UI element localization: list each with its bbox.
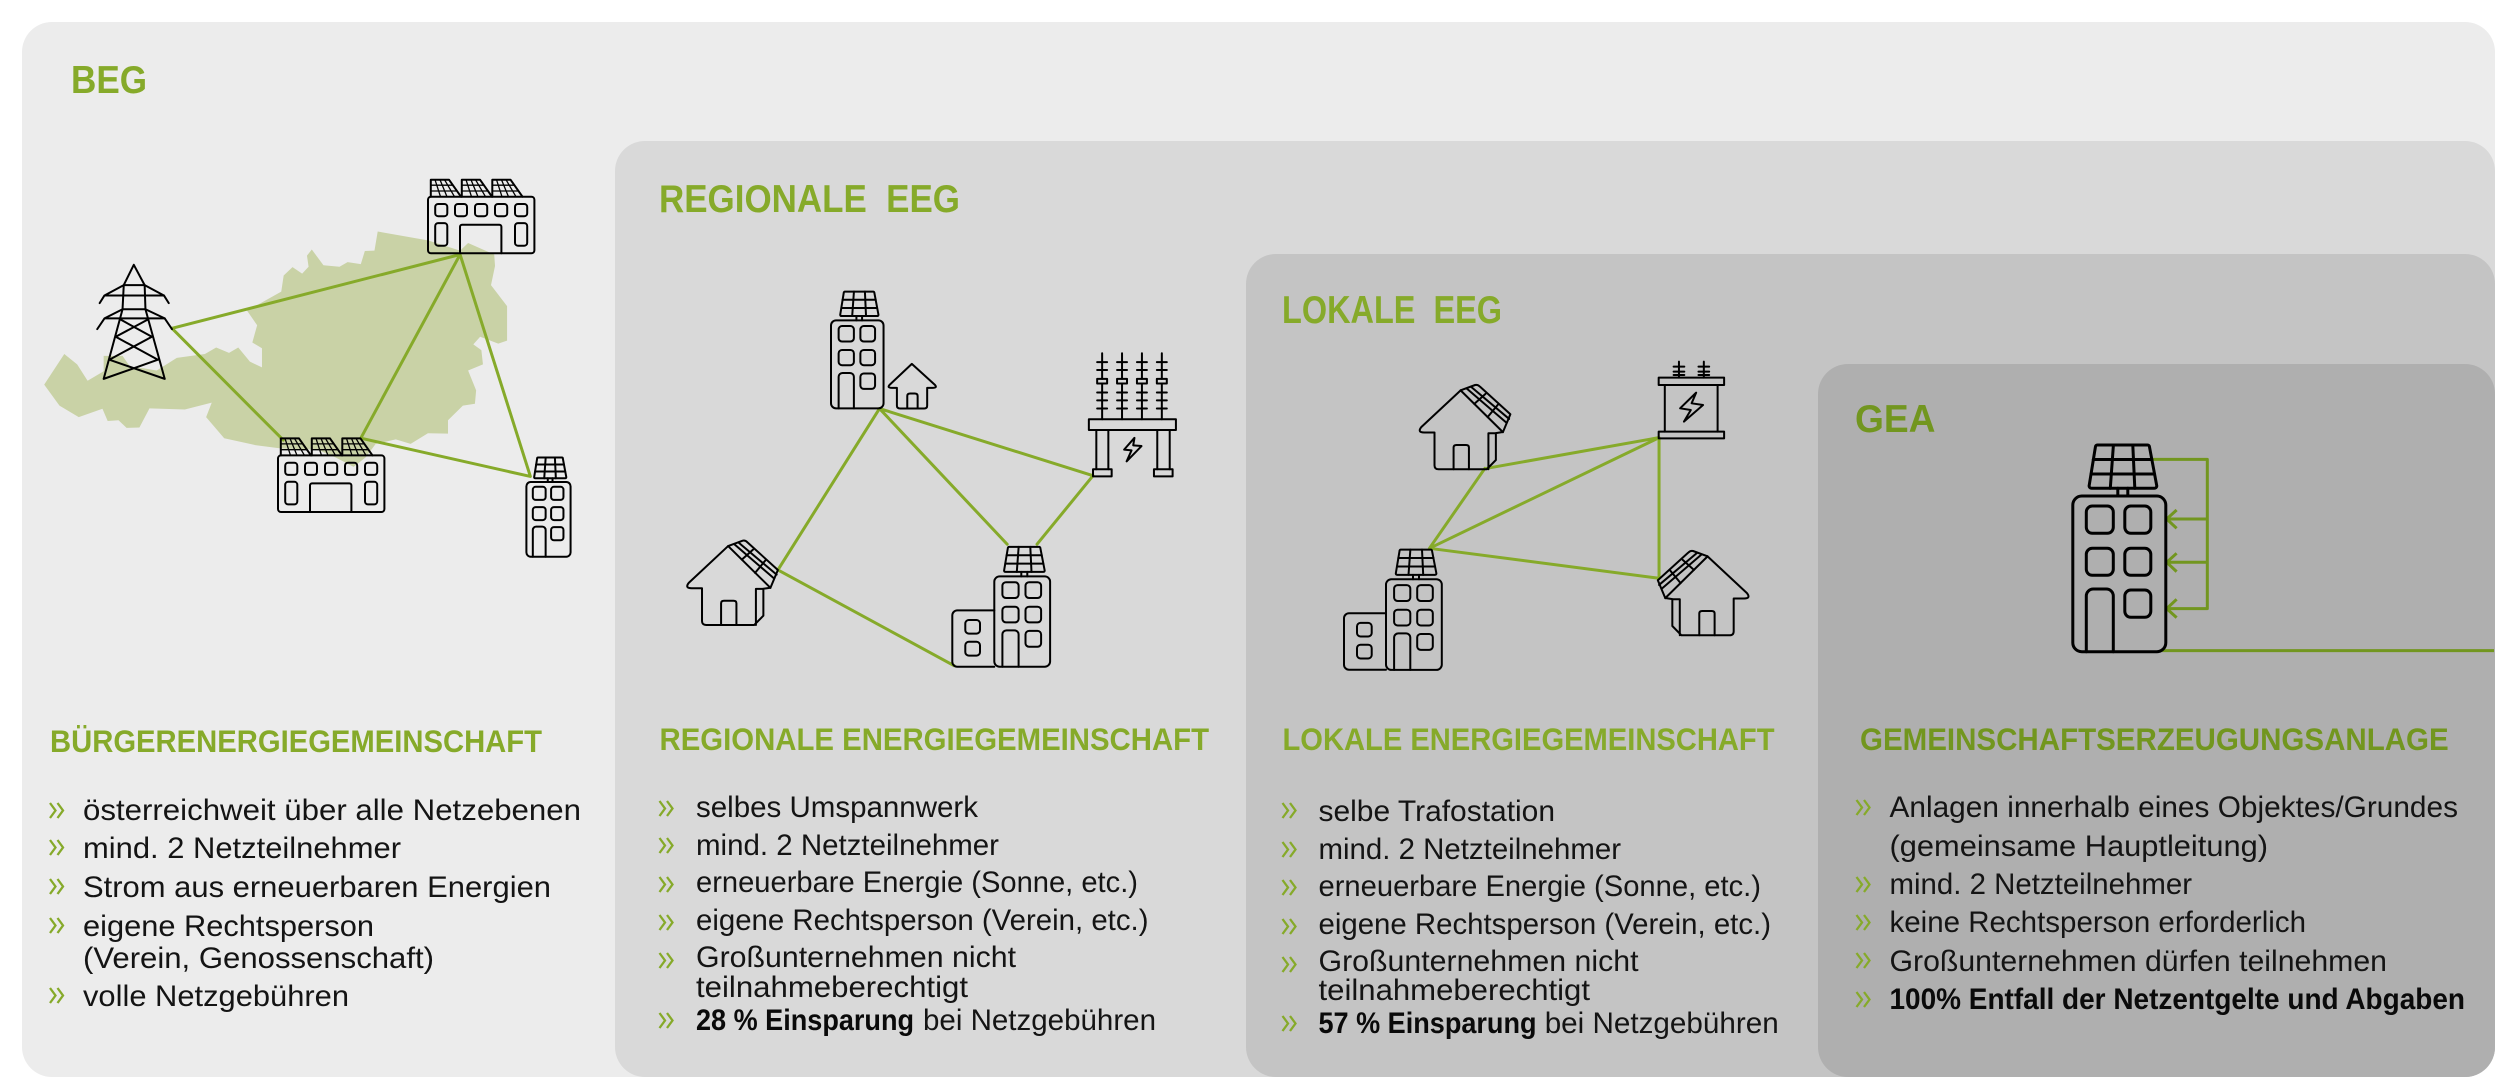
list: Lokale features: Großunternehmen nicht <box>1318 945 1639 978</box>
list: BEG features: Strom aus erneuerbaren Energien <box>83 871 551 904</box>
icon: transformer <box>1659 362 1724 438</box>
list: GEA features: Anlagen innerhalb eines Objektes/Grundes <box>1890 791 2458 824</box>
list: Lokale features: teilnahmeberechtigt <box>1318 974 1591 1007</box>
icon: office with solar panel <box>526 458 571 557</box>
GEA panel background <box>1818 364 2495 1077</box>
list: Regionale features: teilnahmeberechtigt <box>696 971 969 1004</box>
list: Regionale features <box>660 791 1156 1037</box>
subheading: Gemeinschaftserzeugungsanlage: GEMEINSCHAFTSERZEUGUNGSANLAGE <box>1860 721 2449 757</box>
list: Regionale features: 28 % Einsparung <box>696 1004 914 1037</box>
list: GEA features: mind. 2 Netzteilnehmer <box>1890 868 2192 901</box>
Regionale panel background <box>615 141 2495 1077</box>
heading: Lokale EEG: LOKALE EEG <box>1282 289 1502 332</box>
list: Lokale features: erneuerbare Energie (Sonne, etc.) <box>1318 870 1761 903</box>
heading: Regionale EEG: REGIONALE EEG <box>659 178 960 221</box>
list: BEG features: österreichweit über alle Netzebenen <box>83 794 581 827</box>
icon: office with annex and solar panel <box>952 547 1050 667</box>
icon: factory with solar roof, bottom <box>278 438 384 512</box>
list: Regionale features: eigene Rechtsperson (Verein, etc.) <box>696 904 1148 937</box>
list: BEG features: (Verein, Genossenschaft) <box>83 942 434 975</box>
list: Regionale features: erneuerbare Energie (Sonne, etc.) <box>696 866 1138 899</box>
panel: Regionale EEG <box>615 141 2495 1077</box>
list: Lokale features <box>1282 795 1779 1040</box>
icon: house with solar roof <box>687 541 778 625</box>
list: Lokale features: eigene Rechtsperson (Verein, etc.) <box>1318 908 1771 941</box>
connection lines: Lokale <box>1429 438 1659 578</box>
list: Regionale features: bei Netzgebühren <box>923 1004 1156 1037</box>
list: Regionale features: Großunternehmen nicht <box>696 941 1017 974</box>
icon: transmission tower <box>97 265 172 379</box>
grid connection line <box>2162 649 2494 652</box>
heading: GEA: GEA <box>1855 398 1936 441</box>
Lokale panel background <box>1246 254 2495 1077</box>
list: GEA features: Großunternehmen dürfen teilnehmen <box>1890 945 2387 978</box>
subheading: Bürgerenergiegemeinschaft: BÜRGERENERGIEGEMEINSCHAFT <box>50 723 542 759</box>
list: GEA features <box>1856 791 2465 1016</box>
list: GEA features: (gemeinsame Hauptleitung) <box>1890 830 2268 863</box>
panel: GEA <box>1818 364 2495 1077</box>
map of Austria <box>44 232 507 467</box>
list: Lokale features: mind. 2 Netzteilnehmer <box>1318 833 1621 866</box>
list: GEA features: 100% Entfall der Netzentgelte und Abgaben <box>1890 983 2465 1016</box>
subheading: Regionale Energiegemeinschaft: REGIONALE ENERGIEGEMEINSCHAFT <box>660 721 1209 757</box>
icon: factory with solar roof, top <box>428 180 534 253</box>
list: BEG features <box>50 794 581 1013</box>
list: Lokale features: 57 % Einsparung <box>1318 1007 1536 1040</box>
list: BEG features: volle Netzgebühren <box>83 980 349 1013</box>
list: Lokale features: selbe Trafostation <box>1318 795 1555 828</box>
list: BEG features: eigene Rechtsperson <box>83 910 374 943</box>
list: GEA features: keine Rechtsperson erforderlich <box>1890 906 2306 939</box>
icon: house with solar roof, mirrored <box>1658 551 1748 635</box>
connection lines: BEG <box>172 254 530 476</box>
arrows: solar feed into building <box>2153 459 2207 618</box>
list: Lokale features: bei Netzgebühren <box>1545 1007 1779 1040</box>
list: BEG features: mind. 2 Netzteilnehmer <box>83 832 401 865</box>
icon: substation <box>1089 353 1176 476</box>
heading: BEG: BEG <box>71 59 147 102</box>
icon: office with solar panel and small house <box>831 292 936 409</box>
connection lines: Regionale <box>778 409 1093 666</box>
subheading: Lokale Energiegemeinschaft: LOKALE ENERGIEGEMEINSCHAFT <box>1282 721 1774 757</box>
icon: house with solar roof, top <box>1420 385 1510 469</box>
list: Regionale features: selbes Umspannwerk <box>696 791 979 824</box>
panel: Lokale EEG <box>1246 254 2495 1077</box>
icon: office with annex and solar panel <box>1344 550 1442 670</box>
icon: office with solar panel <box>2073 445 2166 652</box>
list: Regionale features: mind. 2 Netzteilnehmer <box>696 829 999 862</box>
